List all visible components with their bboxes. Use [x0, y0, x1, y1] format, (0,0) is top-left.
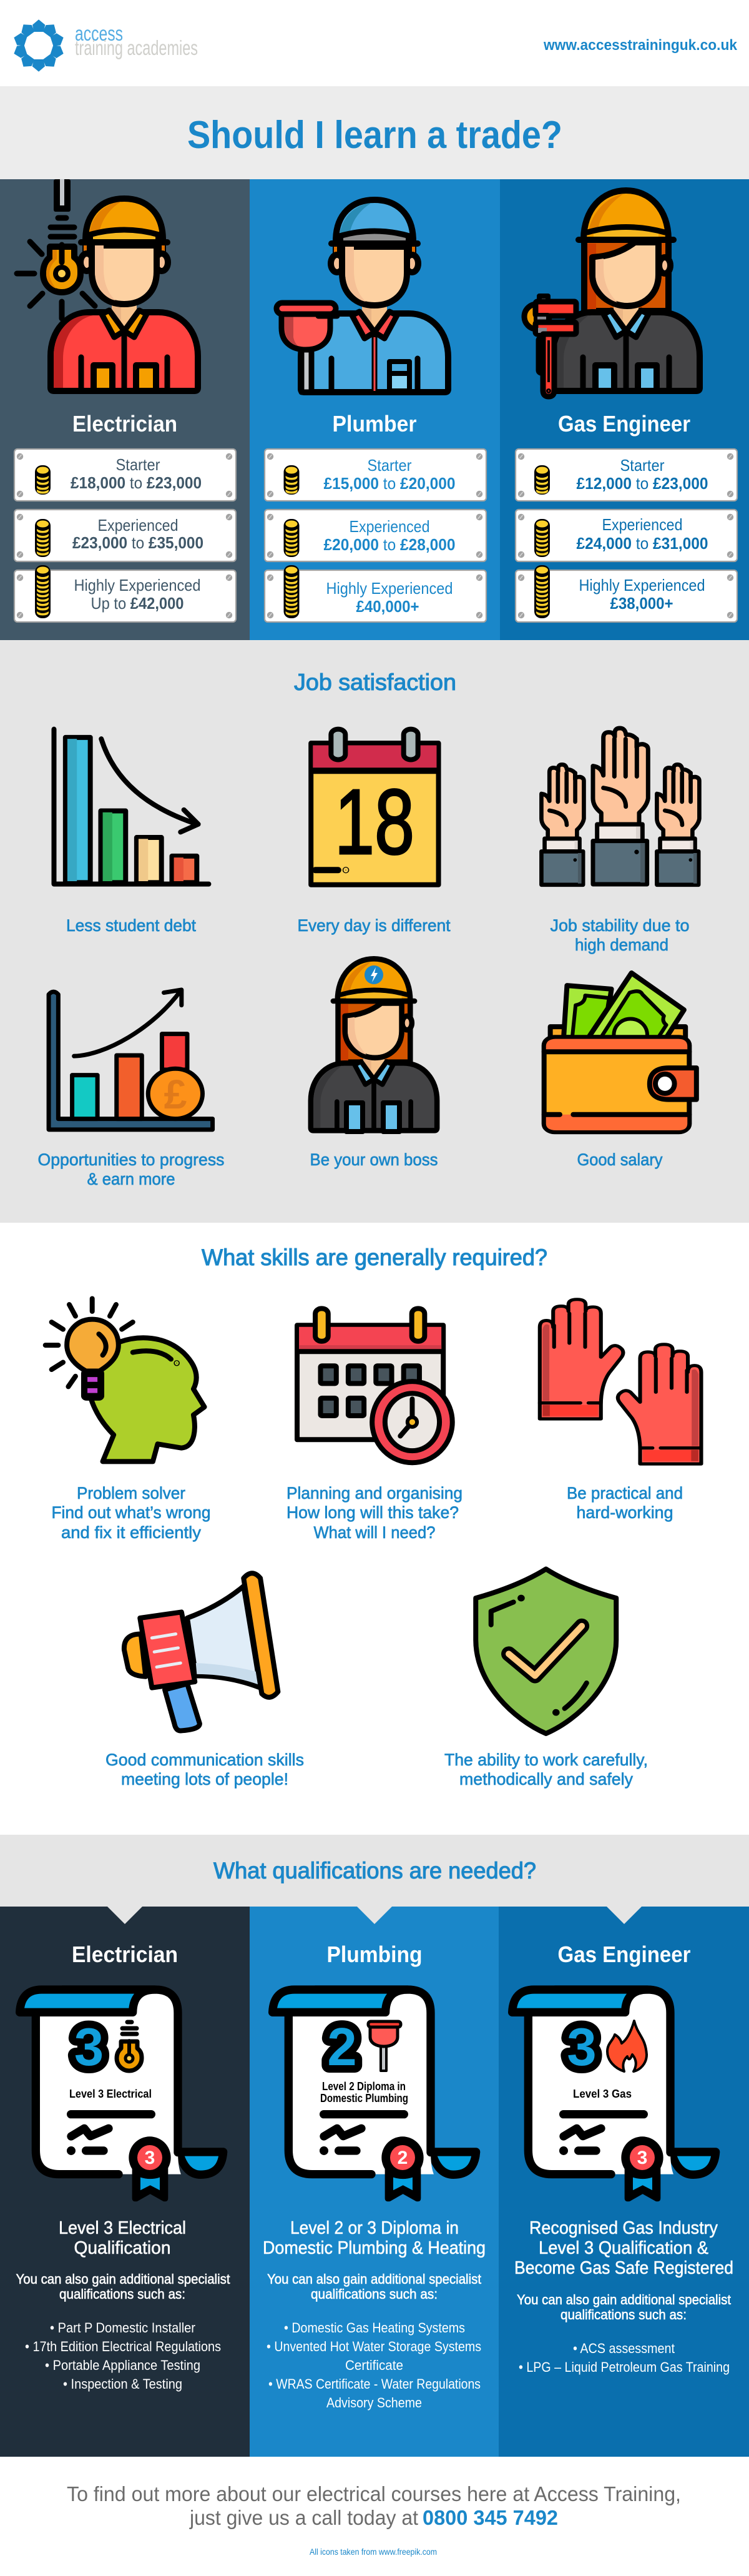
- label: planning: How long will this take?: [286, 1503, 459, 1522]
- qualification title: Recognised Gas Industry: [529, 2218, 718, 2238]
- panel: gas engineer qualification: [499, 1907, 749, 2457]
- icon: mini plunger: [368, 2021, 401, 2071]
- qualification title: Level 3 Electrical: [59, 2218, 186, 2238]
- icon: certificate: [273, 1990, 476, 2201]
- salary card: experienced: £24,000 to £31,000: [577, 534, 708, 553]
- logo: [12, 19, 198, 72]
- icon: pockets: [595, 365, 657, 391]
- salary card: starter: £15,000 to £20,000: [323, 474, 456, 493]
- label: job stability: [551, 916, 689, 954]
- heading: plumber: Plumber: [332, 411, 417, 437]
- intro text: You can also gain additional specialist: [517, 2292, 731, 2307]
- label: every day is different: Every day is different: [297, 916, 451, 935]
- intro text: You can also gain additional specialist: [16, 2271, 230, 2287]
- label: planning: [286, 1484, 463, 1542]
- salary card: experienced: [14, 510, 236, 561]
- title: Should I learn a trade?: [187, 114, 562, 157]
- label: planning: What will I need?: [313, 1523, 436, 1542]
- salary card: starter: Starter: [367, 456, 412, 475]
- label: work carefully: [444, 1750, 648, 1789]
- label: problem solver: [51, 1484, 211, 1542]
- salary card: experienced: [516, 510, 737, 561]
- icon: certificate: Level 2 Diploma in: [322, 2080, 406, 2093]
- panel: plumbing qualification: [250, 1907, 499, 2457]
- calendar number: 18: [335, 771, 414, 874]
- qualification list: • Inspection & Testing: [63, 2376, 182, 2392]
- intro text: qualifications such as:: [311, 2286, 438, 2302]
- icon: calendar and clock: [297, 1308, 453, 1463]
- qualification list: Certificate: [345, 2357, 403, 2373]
- salary card: experienced: Experienced: [97, 516, 179, 535]
- intro text: [267, 2271, 481, 2302]
- heading: electrician: Electrician: [72, 411, 177, 437]
- salary card: highly experienced: Highly Experienced: [74, 576, 201, 595]
- qualification list: • Unvented Hot Water Storage Systems: [267, 2339, 481, 2354]
- qualification list: [25, 2320, 221, 2392]
- label: problem solver: Find out what’s wrong: [51, 1503, 211, 1522]
- icon: certificate: Domestic Plumbing: [320, 2092, 408, 2105]
- qualification title: Level 3 Qualification &: [539, 2238, 708, 2258]
- icon: boss worker: [311, 959, 437, 1132]
- icon: pipe wrench: [536, 296, 576, 397]
- website url: www.accesstraininguk.co.uk: [543, 37, 738, 54]
- label: practical: hard-working: [577, 1503, 673, 1522]
- coin pound sign: £: [164, 1071, 187, 1117]
- intro text: [16, 2271, 230, 2302]
- label: communication: meeting lots of people!: [121, 1770, 288, 1789]
- heading: Electrician: [72, 1942, 178, 1967]
- qualification list: [519, 2341, 730, 2375]
- icon: flame: [607, 2021, 647, 2071]
- icon: work gloves: [540, 1300, 701, 1464]
- heading: skills: What skills are generally required?: [202, 1245, 547, 1270]
- panel: electrician salary: [0, 179, 250, 640]
- salary card: starter: £12,000 to £23,000: [577, 474, 708, 493]
- label: good salary: Good salary: [577, 1150, 663, 1169]
- panel: plumber salary: [250, 179, 500, 640]
- qualification title: [59, 2218, 186, 2258]
- label: opportunities: Opportunities to progress: [37, 1150, 225, 1169]
- icon: pocket: [389, 362, 409, 390]
- label: practical: [567, 1484, 683, 1522]
- panel: electrician qualification: [0, 1907, 250, 2457]
- heading: Gas Engineer: [558, 1942, 690, 1967]
- salary card: highly experienced: [265, 565, 486, 622]
- label: problem solver: and fix it efficiently: [61, 1523, 201, 1542]
- icon: logo ring: [12, 19, 66, 72]
- salary card: highly experienced: [516, 565, 737, 622]
- qualification list: • Portable Appliance Testing: [45, 2357, 200, 2373]
- icon: rising chart with pound coin: [49, 990, 213, 1130]
- icon: certificate: 3: [567, 2018, 597, 2077]
- salary card: experienced: £23,000 to £35,000: [72, 533, 203, 552]
- icon: safety shield: [476, 1569, 616, 1734]
- icon: certificate: [512, 1990, 716, 2201]
- icon: mini bulb: [117, 2022, 142, 2071]
- icon: certificate: Level 3 Electrical: [69, 2088, 152, 2100]
- label: practical: Be practical and: [567, 1484, 683, 1503]
- icon: calendar page: [311, 729, 439, 885]
- footer call to action: [67, 2482, 681, 2529]
- intro text: [517, 2292, 731, 2322]
- salary card: highly experienced: £38,000+: [610, 594, 673, 613]
- icon: certificate: 3: [637, 2148, 647, 2168]
- qualification title: [514, 2218, 733, 2278]
- qualification list: • Part P Domestic Installer: [50, 2320, 195, 2336]
- logo word: access: access: [75, 22, 123, 45]
- icon: plunger: [277, 303, 337, 392]
- qualification title: Level 2 or 3 Diploma in: [290, 2218, 459, 2238]
- salary card: experienced: Experienced: [602, 515, 683, 534]
- intro text: You can also gain additional specialist: [267, 2271, 481, 2287]
- salary card: starter: [265, 449, 486, 501]
- icon: certificate: 2: [398, 2148, 408, 2168]
- icon: plumber worker: [301, 200, 448, 392]
- salary card: experienced: Experienced: [350, 517, 429, 536]
- qualification list: • WRAS Certificate - Water Regulations: [268, 2376, 481, 2392]
- label: job stability: high demand: [575, 935, 668, 954]
- qualification list: • LPG – Liquid Petroleum Gas Training: [519, 2359, 730, 2375]
- icon: megaphone: [124, 1573, 278, 1730]
- salary card: highly experienced: Highly Experienced: [326, 579, 453, 598]
- label: less student debt: Less student debt: [66, 916, 196, 935]
- salary card: experienced: [265, 510, 486, 561]
- label: work carefully: The ability to work carefully,: [444, 1750, 648, 1769]
- icon: wallet with money: [544, 973, 697, 1132]
- icon: raised hands: [541, 728, 699, 885]
- icon: hanging light bulb: [17, 179, 95, 318]
- salary card: starter: [14, 449, 236, 501]
- title band: [0, 86, 749, 179]
- qualification list: • Domestic Gas Heating Systems: [284, 2320, 465, 2336]
- label: communication: [105, 1750, 304, 1789]
- heading: job satisfaction: Job satisfaction: [294, 669, 456, 695]
- qualification title: Qualification: [74, 2238, 171, 2258]
- salary card: highly experienced: Highly Experienced: [579, 576, 705, 595]
- band: qualifications heading: [0, 1835, 749, 1907]
- heading: gas engineer: Gas Engineer: [558, 411, 690, 437]
- icon: head with light bulb: [46, 1298, 205, 1461]
- icon: certificate: 3: [145, 2148, 155, 2168]
- panel: job satisfaction: [0, 640, 749, 1223]
- icon: certificate: 3: [74, 2018, 104, 2077]
- icon: falling bar chart: [54, 729, 208, 884]
- icon: pockets: [94, 365, 156, 391]
- panel: skills: [0, 1223, 749, 1835]
- icon: electrician worker: [51, 199, 198, 391]
- heading: qualifications: What qualifications are needed?: [213, 1858, 536, 1883]
- label: planning: Planning and organising: [286, 1484, 463, 1503]
- label: be your own boss: Be your own boss: [310, 1150, 438, 1169]
- salary card: highly experienced: £40,000+: [356, 597, 419, 616]
- heading: Plumbing: [327, 1942, 422, 1967]
- salary card: starter: Starter: [116, 455, 160, 474]
- footer call to action: To find out more about our electrical courses here at Access Training,: [67, 2482, 681, 2505]
- salary card: experienced: £20,000 to £28,000: [323, 535, 456, 554]
- qualification title: [263, 2218, 486, 2258]
- credit: All icons taken from www.freepik.com: [310, 2547, 437, 2557]
- salary card: highly experienced: Up to £42,000: [91, 594, 184, 613]
- qualification list: Advisory Scheme: [326, 2395, 422, 2411]
- arrow: [607, 1907, 642, 1924]
- header: [12, 19, 738, 72]
- intro text: qualifications such as:: [59, 2286, 185, 2302]
- label: communication: Good communication skills: [105, 1750, 304, 1769]
- arrow: [107, 1907, 142, 1924]
- qualification title: Domestic Plumbing & Heating: [263, 2238, 486, 2258]
- icon: certificate: 2: [327, 2018, 357, 2077]
- phone number: 0800 345 7492: [423, 2506, 558, 2529]
- label: opportunities: [37, 1150, 225, 1188]
- qualification title: Become Gas Safe Registered: [514, 2258, 733, 2278]
- salary card: starter: £18,000 to £23,000: [71, 473, 202, 492]
- panel: gas engineer salary: [500, 179, 749, 640]
- label: problem solver: Problem solver: [77, 1484, 185, 1503]
- arrow: [357, 1907, 392, 1924]
- icon: certificate: [20, 1990, 223, 2201]
- salary card: highly experienced: [14, 565, 236, 622]
- qualification list: [267, 2320, 481, 2411]
- label: opportunities: & earn more: [87, 1170, 175, 1188]
- qualification list: • ACS assessment: [573, 2341, 675, 2356]
- label: work carefully: methodically and safely: [459, 1770, 633, 1789]
- icon: certificate: Level 3 Gas: [573, 2088, 632, 2100]
- icon: gas engineer worker: [524, 190, 700, 397]
- label: job stability: Job stability due to: [551, 916, 689, 935]
- qualification list: • 17th Edition Electrical Regulations: [25, 2339, 221, 2354]
- salary card: starter: [516, 449, 737, 501]
- intro text: qualifications such as:: [561, 2307, 687, 2322]
- salary card: starter: Starter: [620, 456, 665, 475]
- logo words: training academies: training academies: [75, 36, 198, 59]
- footer call to action: just give us a call today at: [189, 2506, 418, 2529]
